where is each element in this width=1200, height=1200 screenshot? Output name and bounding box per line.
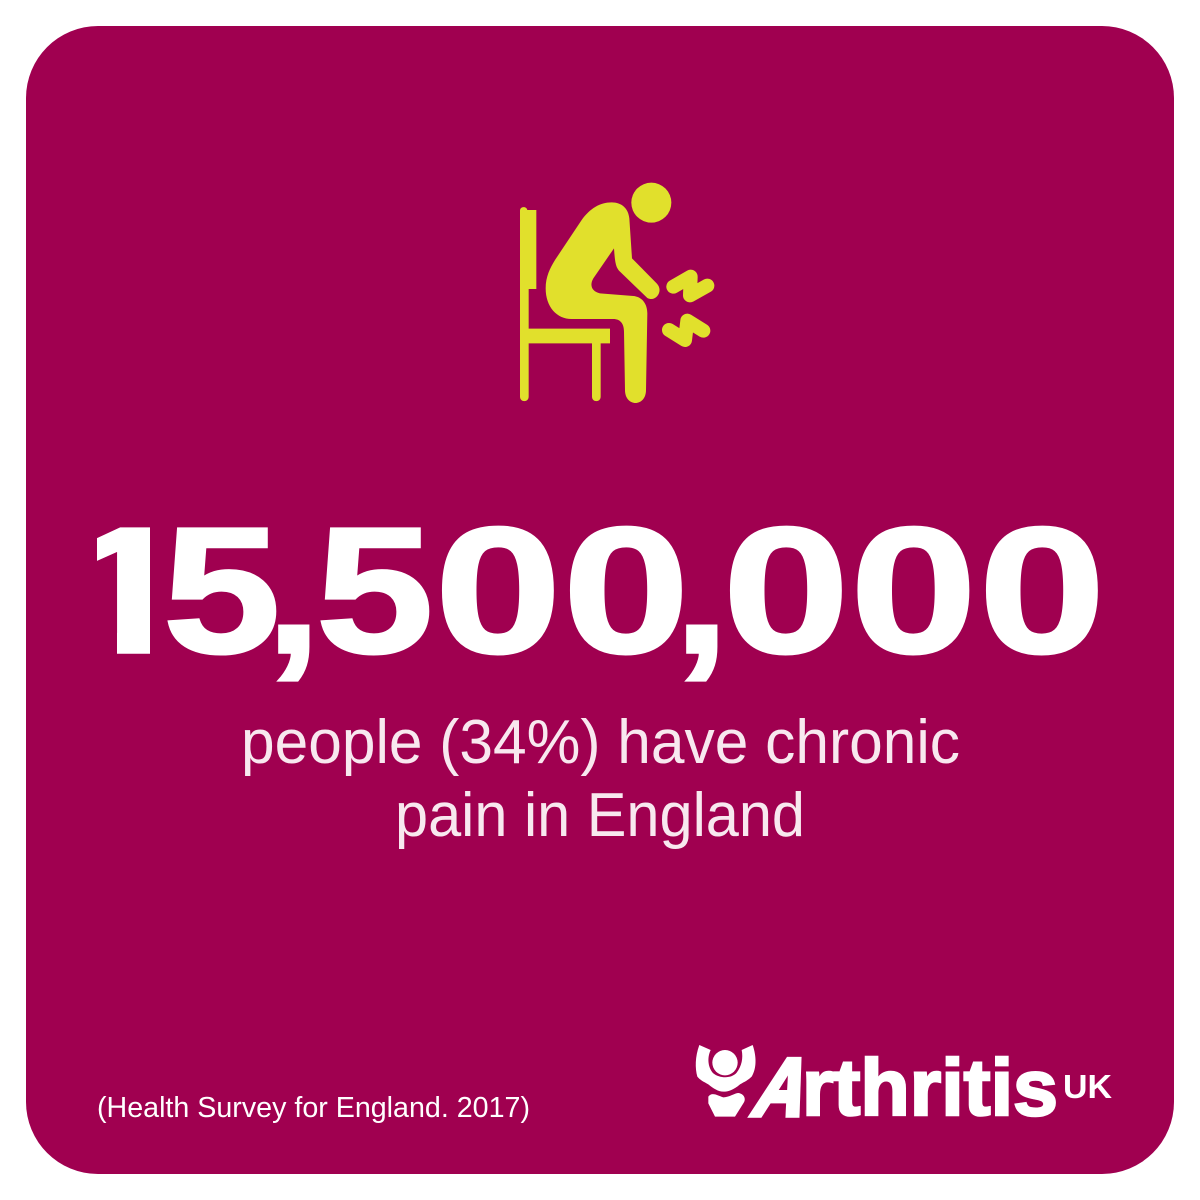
headline number: 0 bbox=[850, 490, 977, 691]
logo letter A: A bbox=[743, 1041, 825, 1133]
description line 2: pain in England bbox=[395, 781, 805, 850]
icon: body bbox=[546, 202, 660, 403]
logo UK: UK bbox=[1063, 1068, 1112, 1105]
logo wordmark bbox=[743, 1041, 1058, 1133]
headline number: 0 bbox=[722, 490, 850, 691]
logo word: rthritis bbox=[802, 1043, 1058, 1132]
headline number bbox=[97, 526, 1098, 682]
headline number: 0 bbox=[562, 490, 690, 691]
icon: chair bbox=[520, 207, 610, 401]
icon: head bbox=[631, 183, 671, 223]
headline number: , bbox=[266, 490, 322, 691]
headline number: 5 bbox=[163, 490, 281, 691]
logo icon bbox=[696, 1045, 756, 1117]
icon: pain bolts bbox=[669, 277, 707, 340]
headline number: 0 bbox=[978, 490, 1106, 691]
source note: (Health Survey for England. 2017) bbox=[97, 1092, 530, 1124]
logo: Arthritis UK bbox=[696, 1041, 1112, 1133]
description line 1: people (34%) have chronic bbox=[241, 708, 960, 777]
icon: person in pain sitting on a chair bbox=[520, 183, 707, 403]
headline number: 0 bbox=[434, 490, 562, 691]
headline number: 1 bbox=[60, 491, 200, 691]
description text bbox=[241, 708, 960, 850]
headline number: , bbox=[674, 490, 730, 691]
headline number: 5 bbox=[316, 490, 434, 691]
